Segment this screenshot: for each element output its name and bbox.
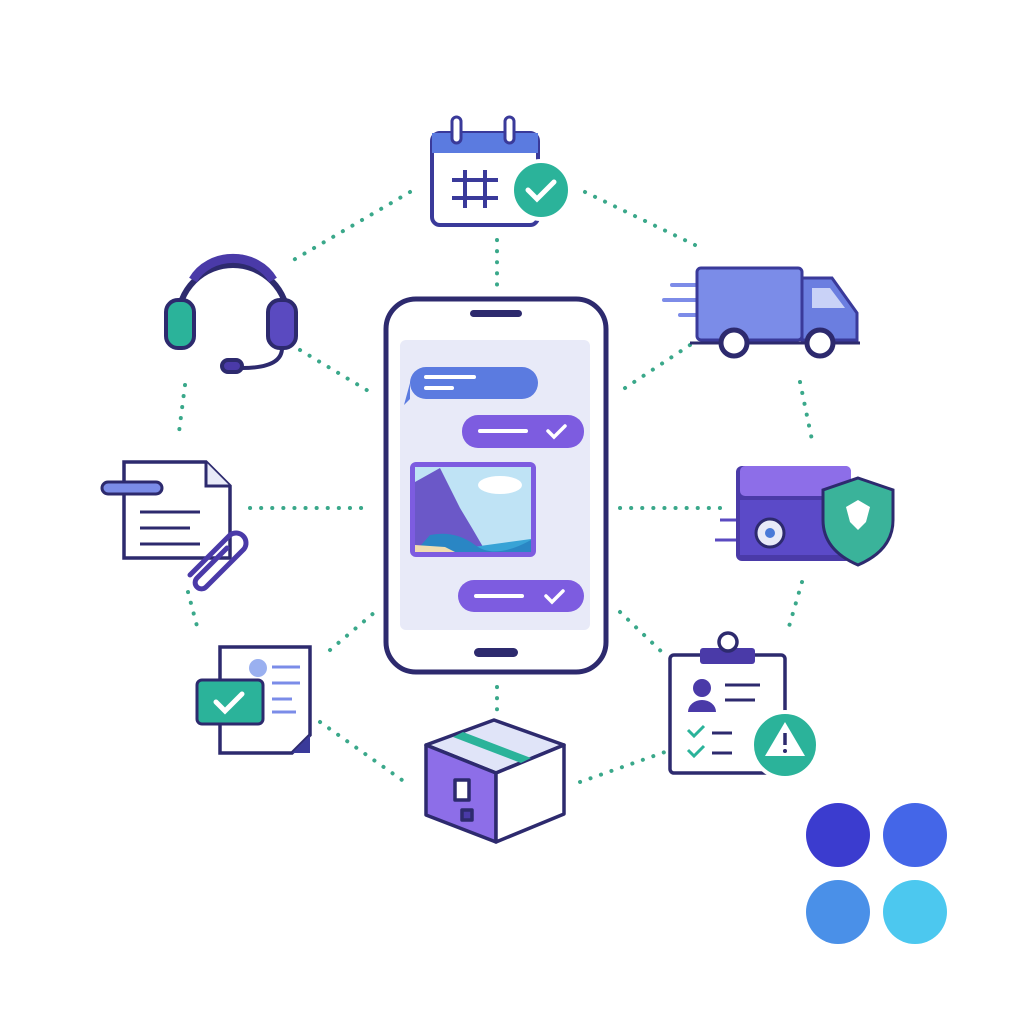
- bubble: outgoing 1: [462, 415, 584, 448]
- image message: [410, 462, 536, 557]
- bubble: outgoing 2: [458, 580, 584, 612]
- icon: resume check: [197, 647, 310, 753]
- icon: truck: [664, 268, 860, 356]
- bubble: incoming: [404, 367, 538, 405]
- connector network: [178, 192, 812, 782]
- icon: card with shield: [715, 466, 893, 565]
- icon: calendar: [432, 117, 570, 225]
- icon: document with clip: [102, 462, 246, 589]
- decorative dots: [806, 803, 947, 944]
- icon: clipboard with warning: [670, 633, 818, 778]
- icon: package box: [426, 720, 564, 842]
- phone: [386, 299, 606, 672]
- icon: headset: [166, 258, 296, 372]
